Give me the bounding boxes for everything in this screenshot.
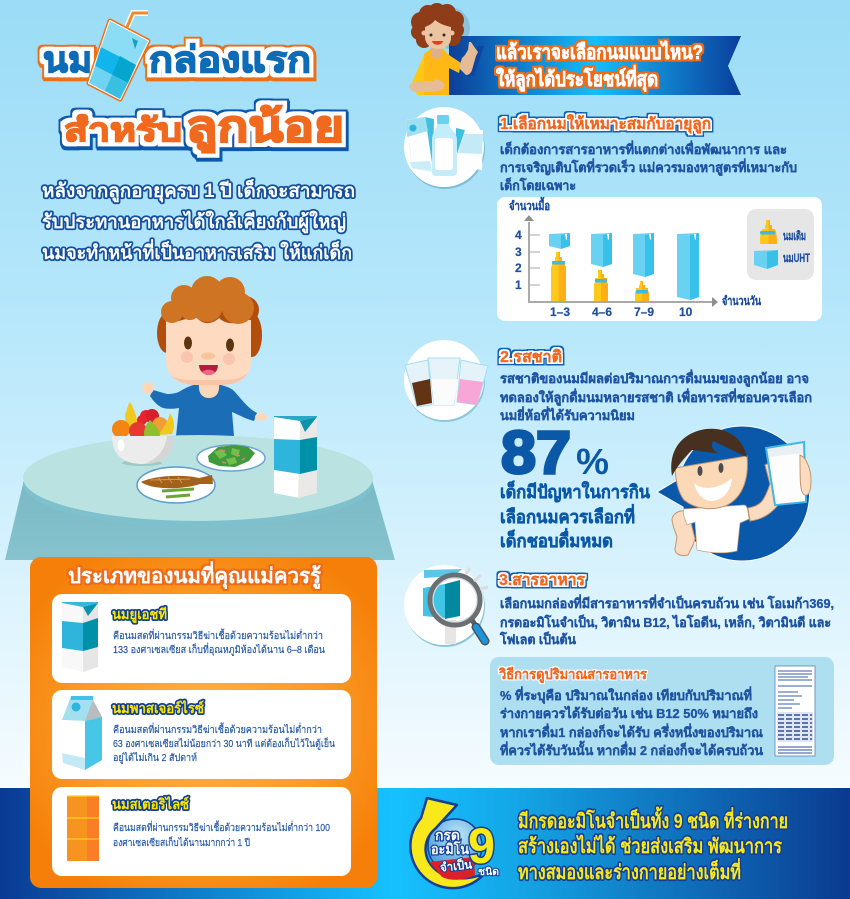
section 1: heading: 1.เลือกนมให้เหมาะสมกับอายุลูก	[500, 114, 711, 135]
banner ribbon: ให้ลูกได้ประโยชน์ที่สุด	[496, 64, 658, 93]
table cloth	[5, 480, 395, 560]
section 1: icon milk packs	[404, 107, 485, 189]
card: UHT	[52, 594, 351, 683]
section 2: text: รสชาติของนมมีผลต่อปริมาณการดื่มนมของลูกน้อย อาจ	[500, 369, 809, 387]
card text: คือนมสดที่ผ่านกรรมวิธีฆ่าเชื้อด้วยความร้อนไม่ต่ำกว่า	[113, 628, 323, 642]
box text: ร่างกายควรได้รับต่อวัน เช่น B12 50% หมายถึง	[500, 705, 758, 721]
chart legend: นมเดิม	[783, 229, 806, 243]
statistic 87%: 87	[501, 419, 571, 486]
boy arms and shirt	[748, 461, 787, 521]
hair shadow behind banner	[428, 7, 470, 49]
UHT carton bars	[549, 233, 699, 300]
intro paragraph	[42, 178, 355, 264]
table top	[23, 435, 373, 527]
chart labels: 1	[515, 278, 522, 292]
statistic 87%	[501, 419, 609, 486]
card: pasteurized	[52, 690, 351, 779]
salad plate	[197, 445, 265, 471]
section 1: text: การเจริญเติบโตที่รวดเร็ว แม่ควรมองหาสูตรที่เหมาะกับ	[500, 158, 797, 176]
badge text: 9	[468, 818, 495, 874]
card: pasteurized: อยู่ได้ไม่เกิน 2 สัปดาห์	[113, 752, 197, 764]
statistic caption: เด็กมีปัญหาในการกิน	[500, 480, 651, 503]
box text	[500, 686, 763, 758]
boy body	[150, 384, 257, 436]
title line 2 right: ลูกน้อย	[186, 103, 344, 153]
statistic caption: เลือกนมควรเลือกที่	[500, 504, 635, 527]
title	[43, 13, 344, 153]
title line 2 left: สำหรับ	[64, 112, 182, 148]
fruit bowl	[112, 402, 174, 466]
chart labels: 2	[515, 261, 522, 275]
section 2: text	[500, 369, 812, 423]
icon: title milk carton with straw	[89, 13, 148, 99]
boy at table	[142, 276, 267, 436]
milk bottle bars	[551, 252, 649, 301]
section 3: text: เลือกนมกล่องที่มีสารอาหารที่จำเป็นครบถ้วน เช่น โอเมก้า369,	[500, 594, 834, 611]
icon: gable carton	[62, 696, 102, 770]
chart labels: 4	[515, 228, 522, 242]
banner text: แล้วเราจะเลือกนมแบบไหน?	[496, 40, 703, 64]
chart labels	[509, 196, 762, 319]
badge text: อะมิโน	[431, 840, 469, 857]
badge text: จำเป็น	[439, 856, 473, 875]
statistic 87%: %	[576, 441, 609, 482]
badge text	[431, 818, 499, 878]
chart labels: 1–3	[550, 305, 570, 319]
card: pasteurized: 63 องศาเซลเซียสไม่น้อยกว่า 30 นาที แต่ต้องเก็บไว้ในตู้เย็น	[113, 736, 335, 750]
milk carton on table	[274, 416, 317, 498]
badge text: ชนิด	[478, 866, 499, 878]
box text: % ที่ระบุคือ ปริมาณในกล่อง เทียบกับปริมาณที่	[500, 686, 752, 704]
bar chart panel	[497, 196, 822, 321]
bottom band	[0, 788, 850, 899]
boy hair front	[170, 290, 250, 323]
intro paragraph: หลังจากลูกอายุครบ 1 ปี เด็กจะสามารถ	[42, 178, 355, 203]
intro paragraph: รับประทานอาหารได้ใกล้เคียงกับผู้ใหญ่	[42, 210, 346, 234]
section 1: text: เด็กต้องการสารอาหารที่แตกต่างเพื่อพัฒนาการ และ	[500, 140, 787, 157]
nutrition label	[775, 666, 815, 756]
section 3: heading: 3.สารอาหาร	[499, 572, 585, 589]
chart legend: นมUHT	[783, 251, 810, 265]
statistic caption: เด็กชอบดื่มหมด	[500, 528, 613, 551]
boy face	[184, 336, 192, 350]
mother character	[409, 3, 484, 95]
intro paragraph: นมจะทำหน้าที่เป็นอาหารเสริม ให้แก่เด็ก	[42, 239, 352, 264]
section 3: text: โฟเลต เป็นต้น	[499, 630, 576, 647]
chart labels: 7–9	[634, 305, 654, 319]
boy with milk glass	[657, 426, 811, 561]
section 2: text: นมยี่ห้อที่ได้รับความนิยม	[500, 406, 635, 423]
statistic caption	[500, 480, 651, 551]
box text: ที่ควรได้รับวันนั้น หากดื่ม 2 กล่องก็จะได้ครบถ้วน	[500, 740, 763, 758]
section 3: text: กรดอะมิโนจำเป็น, วิตามิน B12, ไอโอดีน, เหล็ก, วิตามินดี และ	[500, 613, 831, 630]
chart labels: จำนวนมื้อ	[509, 196, 550, 213]
badge red ribbon	[429, 857, 475, 880]
section 1: text	[500, 140, 797, 193]
section 2: icon glasses	[404, 340, 488, 422]
bottom text: มีกรดอะมิโนจำเป็นทั้ง 9 ชนิด ที่ร่างกาย	[518, 806, 788, 833]
bottom text: ทางสมองและร่างกายอย่างเต็มที่	[518, 857, 741, 884]
badge: 9 essential amino acids	[410, 798, 499, 888]
panel: milk types	[30, 557, 377, 888]
bottom text: สร้างเองไม่ได้ ช่วยส่งเสริม พัฒนาการ	[518, 834, 782, 858]
chart labels: 10	[679, 305, 693, 319]
section 1: text: เด็กโดยเฉพาะ	[500, 176, 576, 193]
card text: คือนมสดที่ผ่านกรรมวิธีฆ่าเชื้อด้วยความร้อนไม่ต่ำกว่า 100	[113, 820, 330, 834]
chart labels: 3	[515, 245, 522, 259]
boy head	[166, 320, 251, 385]
boy hair back	[157, 296, 262, 357]
section 3: text	[499, 594, 834, 647]
milk glass	[766, 442, 806, 505]
box text: หากเราดื่ม1 กล่องก็จะได้รับ ครึ่งหนึ่งของปริมาณ	[500, 723, 763, 740]
icon: UHT carton	[62, 602, 98, 672]
icon: sterilized carton	[67, 796, 99, 861]
card text: คือนมสดที่ผ่านกรรมวิธีฆ่าเชื้อด้วยความร้อนไม่ต่ำกว่า	[113, 722, 322, 736]
card: sterilized	[52, 787, 351, 876]
fish plate	[137, 467, 215, 503]
section 2: heading: 2.รสชาติ	[500, 348, 562, 366]
badge text: กรด	[435, 827, 460, 843]
card title: นมสเตอริไลซ์	[112, 795, 189, 812]
badge sphere	[428, 819, 482, 873]
section 3: icon magnifier	[404, 565, 488, 647]
bottom text	[518, 806, 788, 884]
boy head	[675, 456, 747, 509]
chart legend	[747, 209, 814, 280]
title line 1 left: นม	[43, 39, 92, 80]
card: sterilized: องศาเซลเซียสเก็บได้นานมากกว่า 1 ปี	[113, 835, 250, 849]
box title: วิธีการดูปริมาณสารอาหาร	[498, 666, 647, 683]
banner ribbon	[449, 36, 741, 95]
badge arrow ring	[410, 798, 484, 888]
card: UHT: 133 องศาเซลเซียส เก็บที่อุณหภูมิห้องได้นาน 6–8 เดือน	[113, 642, 325, 656]
card title: นมยูเอชที	[112, 606, 167, 623]
card title: นมพาสเจอร์ไรซ์	[112, 699, 204, 716]
section 2: text: ทดลองให้ลูกดื่มนมหลายรสชาติ เพื่อหารสที่ชอบควรเลือก	[500, 388, 812, 406]
panel heading: ประเภทของนมที่คุณแม่ควรรู้	[68, 560, 322, 590]
speech bubble circle	[657, 426, 810, 561]
chart labels: 4–6	[592, 305, 612, 319]
nutrition how-to box	[490, 657, 834, 765]
chart labels: จำนวนวัน	[722, 294, 762, 308]
title line 1 right: กล่องแรก	[149, 39, 311, 80]
chart axes	[524, 215, 718, 307]
